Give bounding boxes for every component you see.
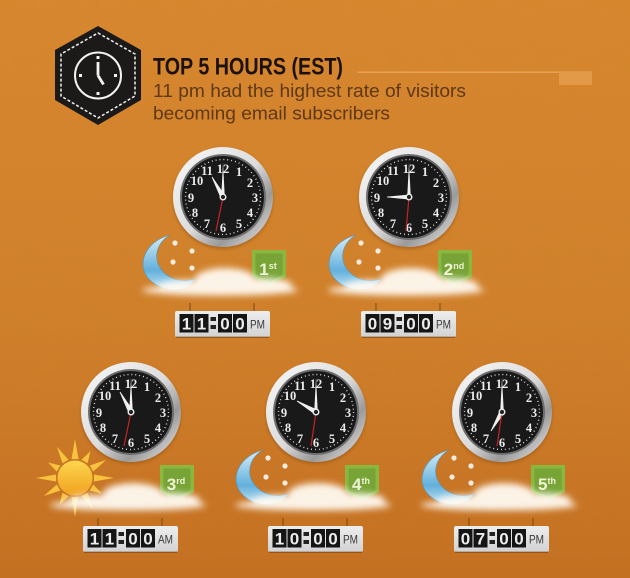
clock: 11:00: 7 — [204, 217, 210, 231]
clock: 11:00: 11 — [201, 164, 213, 178]
timer: 10:00 PM: 1 — [275, 530, 284, 548]
clock: 9:00: 10 — [377, 174, 389, 188]
clock: 11:00: 5 — [144, 432, 150, 446]
clock: 11:00: 9 — [188, 191, 194, 205]
clock: 10:00: 5 — [329, 432, 335, 446]
timer: 11:00 AM: AM — [158, 534, 173, 546]
badge: 1st: st — [269, 261, 277, 271]
badge: 3rd: 3 — [167, 475, 176, 494]
timer: 11:00 PM: 0 — [220, 314, 230, 334]
clock: 11:00: 3 — [160, 406, 166, 420]
timer: 10:00 PM: PM — [343, 534, 358, 546]
clock: 11:00 — [173, 147, 273, 249]
cloud — [50, 483, 206, 510]
clock: 9:00: 1 — [422, 165, 428, 179]
clock: 10:00: 10 — [284, 389, 296, 403]
panel: 3rd 11:00 AM — [36, 362, 206, 553]
clock: 11:00: 5 — [236, 217, 242, 231]
clock: 11:00: 9 — [96, 406, 102, 420]
clock: 9:00: 5 — [422, 217, 428, 231]
badge: 4th — [345, 465, 379, 501]
clock: 9:00: 3 — [438, 191, 444, 205]
timer: 07:00 PM: PM — [529, 534, 544, 546]
badge: 3rd — [160, 465, 194, 501]
clock: 11:00: 11 — [109, 379, 121, 393]
timer: 07:00 PM: 7 — [476, 530, 485, 548]
icon: moon — [143, 235, 195, 290]
clock: 7:00 — [452, 362, 552, 464]
timer: 09:00 PM: 9 — [383, 314, 392, 334]
clock: 9:00: 2 — [433, 176, 439, 190]
clock: 9:00: 8 — [378, 206, 384, 220]
clock: 10:00: 6 — [313, 436, 319, 450]
clock: 11:00: 10 — [99, 389, 111, 403]
clock: 10:00: 7 — [297, 432, 303, 446]
title: TOP 5 HOURS (EST) — [153, 54, 343, 80]
clock: 11:00 — [81, 362, 181, 464]
badge: 2nd: nd — [453, 261, 464, 271]
timer: 09:00 PM: 0 — [368, 314, 377, 334]
panel: 1st 11:00 PM — [142, 147, 298, 338]
clock: 11:00: 6 — [128, 436, 134, 450]
clock: 10:00: 4 — [340, 421, 347, 435]
clock: 10:00: 9 — [281, 406, 287, 420]
cloud — [235, 483, 391, 510]
badge: 1st — [252, 250, 286, 286]
clock: 7:00: 12 — [496, 377, 508, 391]
panel: 5th 07:00 PM — [421, 362, 577, 553]
clock: 7:00: 9 — [467, 406, 473, 420]
timer: 10:00 PM — [268, 518, 363, 553]
clock: 9:00: 4 — [433, 206, 440, 220]
clock: 11:00: 2 — [247, 176, 253, 190]
badge: 4th: th — [361, 476, 370, 486]
clock: 11:00: 3 — [252, 191, 258, 205]
clock: 7:00: 4 — [526, 421, 533, 435]
clock: 7:00: 3 — [531, 406, 537, 420]
clock: 11:00: 10 — [191, 174, 203, 188]
clock: 11:00: 12 — [125, 377, 137, 391]
timer: 07:00 PM: 0 — [499, 530, 509, 548]
badge: 4th: 4 — [352, 475, 361, 494]
clock: 9:00: 6 — [406, 221, 412, 235]
timer: 07:00 PM — [454, 518, 549, 553]
icon: hexagon clock badge — [55, 26, 141, 125]
icon: moon — [422, 450, 474, 505]
timer: 07:00 PM: 0 — [514, 530, 524, 548]
panel: 4th 10:00 PM — [235, 362, 391, 553]
cloud — [142, 268, 298, 296]
timer: 09:00 PM — [361, 303, 456, 338]
clock: 11:00: 6 — [220, 221, 226, 235]
icon: sun — [36, 439, 114, 517]
timer: 11:00 PM: 1 — [197, 314, 206, 334]
clock: 11:00: 4 — [155, 421, 162, 435]
clock: 11:00: 1 — [236, 165, 242, 179]
clock: 7:00: 10 — [470, 389, 482, 403]
clock: 9:00: 11 — [387, 164, 399, 178]
clock: 9:00: 7 — [390, 217, 396, 231]
clock: 10:00: 3 — [345, 406, 351, 420]
timer: 11:00 AM: 0 — [143, 530, 153, 548]
clock: 11:00: 7 — [112, 432, 118, 446]
timer: 11:00 AM — [83, 518, 178, 553]
badge: 2nd: 2 — [444, 260, 453, 279]
cloud — [328, 268, 484, 296]
timer: 07:00 PM: 0 — [461, 530, 470, 548]
timer: 11:00 AM: 1 — [90, 530, 99, 548]
timer: 10:00 PM: 0 — [328, 530, 338, 548]
clock: 7:00: 11 — [480, 379, 492, 393]
icon: moon — [329, 235, 381, 290]
panel: 2nd 09:00 PM — [328, 147, 484, 338]
clock: 9:00: 12 — [403, 162, 415, 176]
clock: 9:00: 9 — [374, 191, 380, 205]
subtitle: 11 pm had the highest rate of visitors — [153, 80, 466, 101]
clock: 10:00: 2 — [340, 391, 346, 405]
clock: 7:00: 2 — [526, 391, 532, 405]
clock: 11:00: 12 — [217, 162, 229, 176]
clock: 10:00: 1 — [329, 380, 335, 394]
timer: 09:00 PM: 0 — [421, 314, 431, 334]
timer: 11:00 AM: 0 — [128, 530, 138, 548]
timer: 11:00 AM: 1 — [105, 530, 114, 548]
timer: 10:00 PM: 0 — [313, 530, 323, 548]
badge: 5th — [531, 465, 565, 501]
timer: 11:00 PM: PM — [250, 320, 265, 332]
clock: 11:00: 8 — [192, 206, 198, 220]
badge: 5th: th — [547, 476, 556, 486]
icon: moon — [236, 450, 288, 505]
clock: 11:00: 1 — [144, 380, 150, 394]
clock: 10:00: 12 — [310, 377, 322, 391]
timer: 11:00 PM: 1 — [182, 314, 191, 334]
clock: 11:00: 2 — [155, 391, 161, 405]
clock: 11:00: 4 — [247, 206, 254, 220]
badge: 5th: 5 — [538, 475, 547, 494]
clock: 7:00: 1 — [515, 380, 521, 394]
timer: 09:00 PM: 0 — [406, 314, 416, 334]
subtitle: becoming email subscribers — [153, 102, 390, 124]
clock: 7:00: 6 — [499, 436, 505, 450]
badge: 1st: 1 — [259, 260, 269, 279]
badge: 3rd: rd — [176, 476, 185, 486]
badge: 2nd — [438, 250, 472, 286]
timer: 11:00 PM: 0 — [235, 314, 245, 334]
clock: 10:00: 11 — [294, 379, 306, 393]
clock: 9:00 — [359, 147, 459, 249]
timer: 11:00 PM — [175, 303, 270, 338]
timer: 09:00 PM: PM — [436, 320, 451, 332]
clock: 7:00: 8 — [471, 421, 477, 435]
clock: 11:00: 8 — [100, 421, 106, 435]
clock: 10:00: 8 — [285, 421, 291, 435]
cloud — [421, 483, 577, 510]
clock: 10:00 — [266, 362, 366, 464]
clock: 7:00: 5 — [515, 432, 521, 446]
header rule — [357, 72, 592, 85]
clock: 7:00: 7 — [483, 432, 489, 446]
timer: 10:00 PM: 0 — [290, 530, 299, 548]
